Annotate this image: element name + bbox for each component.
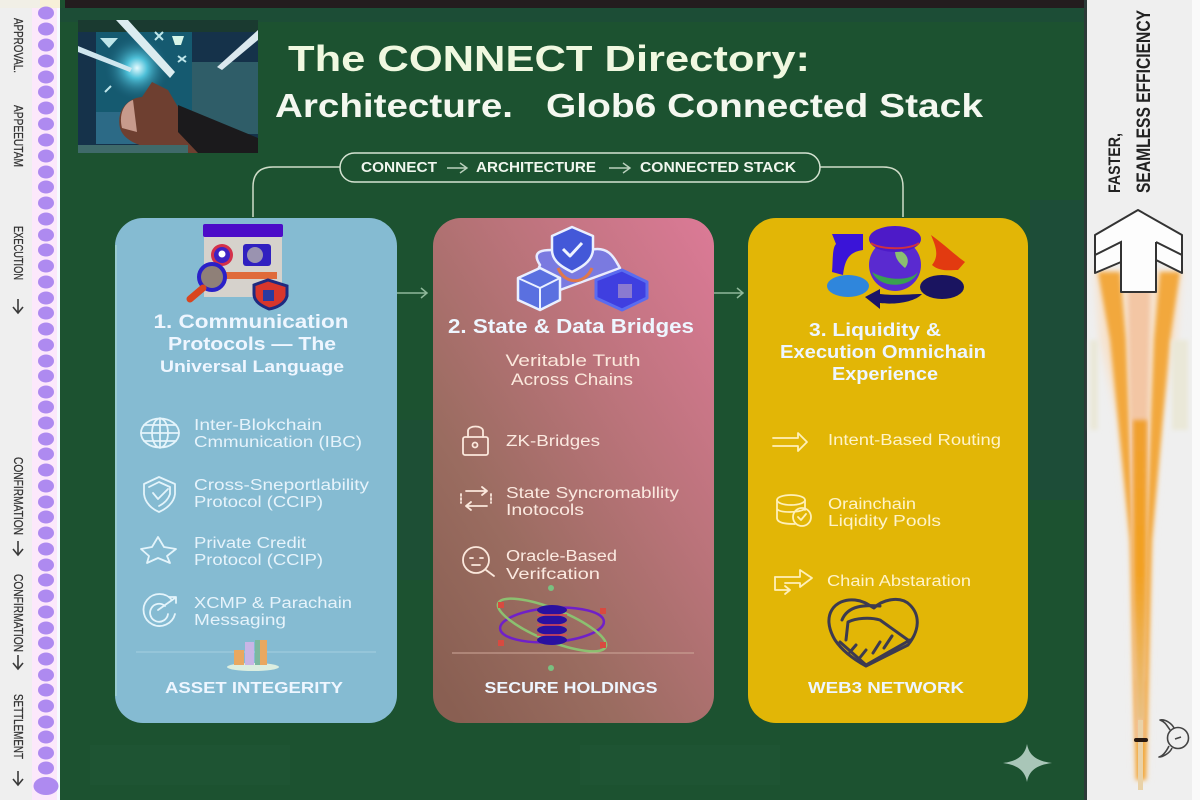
- icon: shield check: [144, 477, 175, 512]
- arrow: settlement: [13, 771, 23, 785]
- panel 2 footer: SECURE HOLDINGS: [484, 680, 658, 697]
- icon: routing arrow: [773, 433, 807, 451]
- item: chain abstraction: Chain Abstaration: [827, 573, 971, 590]
- icon: omnichain globe and tokens: [827, 226, 965, 309]
- panel 2: state and data bridges: [433, 218, 714, 723]
- connector lines from pill to cards: [253, 167, 903, 217]
- arrow: confirmation 2: [13, 655, 23, 669]
- title line 2: Glob6 Connected Stack: [546, 87, 984, 124]
- icon: browser security window: [190, 224, 287, 309]
- icon: orbiting data stack: [492, 585, 612, 671]
- icon: magnifier: [463, 547, 494, 576]
- title line 2: Architecture.: [275, 87, 513, 124]
- pill text: architecture: ARCHITECTURE: [476, 160, 596, 176]
- label: appellatum: APPEEUTAM: [11, 105, 26, 167]
- icon: padlock: [463, 426, 488, 455]
- title line 1: The CONNECT Directory:: [288, 38, 810, 79]
- item: intent routing: Intent-Based Routing: [828, 432, 1001, 449]
- icon: sync arrows: [461, 487, 491, 510]
- arrow: panel 2 to panel 3: [714, 288, 743, 298]
- item: liquidity pools: Liqidity Pools: [828, 513, 941, 530]
- icon: star: [141, 537, 176, 563]
- item: XCMP: [194, 595, 352, 629]
- label: faster: FASTER,: [1105, 133, 1124, 193]
- item: liquidity pools: Orainchain: [828, 496, 916, 513]
- icon: bar chart: [227, 640, 279, 671]
- item: state protocols: Inotocols: [506, 502, 584, 519]
- item: cross-chain protocol: Cross-Sneportlability: [194, 477, 369, 494]
- left rail labels: [11, 18, 26, 785]
- pill arrow 1: [447, 163, 467, 173]
- icon: target cycle: [144, 594, 176, 626]
- title line 2: [275, 87, 984, 124]
- icon: globe: [141, 418, 179, 448]
- right rail: [1084, 0, 1200, 800]
- heading line 1: 3. Liquidity &: [809, 319, 941, 340]
- panel 3 footer: WEB3 NETWORK: [808, 680, 965, 697]
- divider: [136, 651, 376, 653]
- item: IBC: Inter-Blokchain: [194, 417, 322, 434]
- arrow: panel 1 to panel 2: [397, 288, 427, 298]
- panel 1: communication protocols: [115, 218, 397, 723]
- panel 3 heading: [780, 319, 986, 384]
- item: private credit: Private Credit: [194, 535, 307, 552]
- left rail background: [0, 0, 65, 800]
- item: IBC: [194, 417, 362, 451]
- item: cross-chain protocol: Protocol (CCIP): [194, 494, 323, 511]
- heading line 1: 1. Communication: [154, 312, 348, 333]
- pill text: connected stack: CONNECTED STACK: [640, 160, 797, 176]
- panel 2 heading: 2. State & Data Bridges: [448, 316, 694, 338]
- icon: handshake heart: [829, 599, 917, 666]
- title: [275, 38, 984, 124]
- label: approval: APPROVAL.: [11, 18, 26, 73]
- item: oracle verification: [506, 548, 617, 583]
- label: execution: EXECUTION: [11, 226, 26, 280]
- rail heading: faster seamless efficiency: [1105, 10, 1155, 193]
- heading line 3: Universal Language: [160, 357, 344, 376]
- purple dot rail: [34, 6, 58, 795]
- icon: winged clock: [1159, 720, 1188, 757]
- arrow: execution: [13, 299, 23, 313]
- heading line 3: Experience: [832, 363, 938, 384]
- big upward arrow: [1095, 210, 1182, 292]
- hero image: hand touching digital network: [78, 20, 258, 153]
- label: confirmation 2: CONFIRMATION: [11, 574, 26, 652]
- item: XCMP: XCMP & Parachain: [194, 595, 352, 612]
- panel 2 subheading: Veritable Truth: [506, 352, 640, 370]
- item: oracle verification: Verifcation: [506, 566, 600, 583]
- panel 1 footer: ASSET INTEGERITY: [165, 680, 343, 697]
- item: liquidity pools: [828, 496, 941, 530]
- panel 2 subheading: [506, 352, 640, 389]
- label: settlement: SETTLEMENT: [11, 694, 26, 759]
- icon: blockchain shield and cubes: [518, 227, 647, 310]
- item: state protocols: State Syncromabllity: [506, 485, 679, 502]
- panel 1 heading: [154, 312, 348, 376]
- panel 2 subheading: Across Chains: [511, 371, 633, 389]
- trail tick: [1134, 738, 1148, 742]
- icon: chain abstraction arrows: [775, 570, 812, 594]
- flow pill: [340, 153, 820, 182]
- item: XCMP: Messaging: [194, 612, 286, 629]
- item: state protocols: [506, 485, 679, 519]
- label: confirmation 1: CONFIRMATION: [11, 457, 26, 535]
- item: oracle verification: Oracle-Based: [506, 548, 617, 565]
- icon: database check: [777, 495, 811, 526]
- flame rocket trail: [1090, 270, 1188, 790]
- item: ZK-Bridges: ZK-Bridges: [506, 433, 600, 450]
- heading line 2: Protocols — The: [168, 334, 336, 354]
- item: private credit: Protocol (CCIP): [194, 552, 323, 569]
- panel 3: liquidity and execution: [748, 218, 1028, 723]
- heading line 2: Execution Omnichain: [780, 341, 986, 362]
- divider: [452, 652, 694, 654]
- arrow: confirmation 1: [13, 541, 23, 555]
- icon: sparkle star: [1003, 744, 1052, 782]
- pill text: connect: CONNECT: [361, 160, 437, 176]
- item: IBC: Cmmunication (IBC): [194, 434, 362, 451]
- item: private credit: [194, 535, 323, 569]
- pill arrow 2: [609, 163, 630, 173]
- item: cross-chain protocol: [194, 477, 369, 511]
